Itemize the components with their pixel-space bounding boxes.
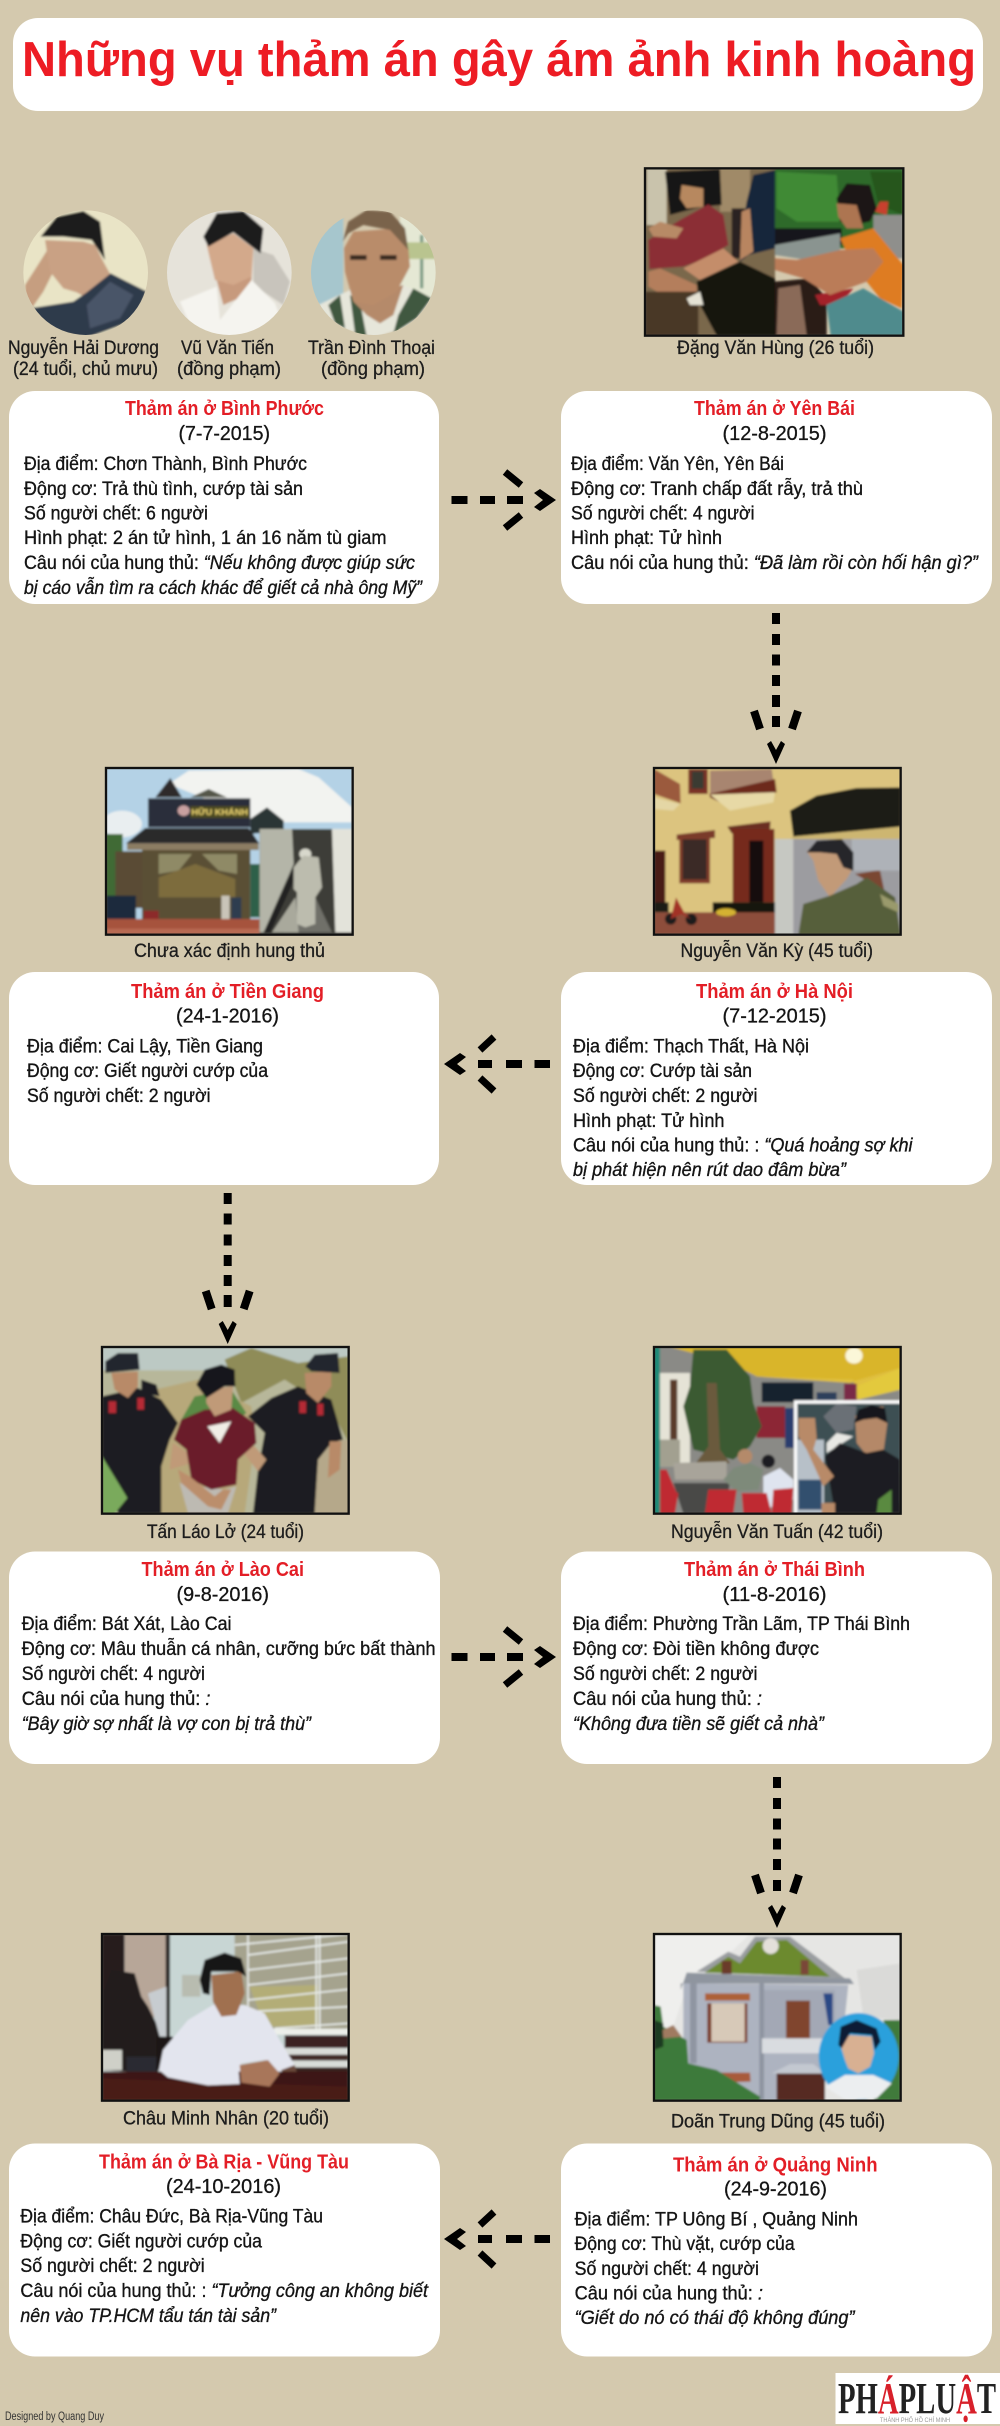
details: bị phát hiện nên rút dao đâm bừa” — [573, 1159, 847, 1181]
arrow: Lào Cai to Thái Bình — [452, 1629, 556, 1685]
heading: Thảm án ở Hà Nội — [696, 981, 853, 1003]
caption: Nguyễn Văn Kỳ: Nguyễn Văn Kỳ (45 tuổi) — [680, 940, 873, 962]
panel: Thảm án ở Yên Bái — [561, 391, 992, 604]
details: Câu nói của hung thủ: “Nếu không được giúp sức — [24, 552, 415, 574]
photo: Nguyễn Hải Dương portrait — [23, 210, 148, 335]
details: Địa điểm: Văn Yên, Yên Bái — [571, 453, 784, 475]
details: Địa điểm: Chơn Thành, Bình Phước — [24, 453, 307, 475]
photo: Châu Minh Nhân — [102, 1934, 349, 2101]
details: Câu nói của hung thủ: “Đã làm rồi còn hối hận gì?” — [571, 552, 979, 574]
arrow: Quảng Ninh to Bà Rịa - Vũng Tàu — [444, 2212, 550, 2266]
date: (11-8-2016) — [722, 1584, 826, 1606]
heading: Thảm án ở Bình Phước — [125, 398, 324, 420]
heading: Thảm án ở Thái Bình — [684, 1559, 865, 1581]
heading: Thảm án ở Quảng Ninh — [673, 2155, 878, 2177]
photo: Tấn Láo Lở arrest — [102, 1347, 349, 1514]
details: Động cơ: Giết người cướp của — [20, 2230, 262, 2252]
details — [20, 2206, 429, 2327]
heading: Thảm án ở Lào Cai — [142, 1559, 304, 1581]
panel: Thảm án ở Lào Cai — [9, 1552, 440, 1764]
caption: Tấn Láo Lở: Tấn Láo Lở (24 tuổi) — [147, 1522, 304, 1543]
panel: Thảm án ở Thái Bình — [561, 1552, 992, 1764]
details: Câu nói của hung thủ: : — [573, 1688, 762, 1710]
photo: Vũ Văn Tiến portrait — [167, 210, 292, 335]
details: Địa điểm: Bát Xát, Lào Cai — [22, 1613, 232, 1635]
logo: Pháp Luật: THÀNH PHỐ HỒ CHÍ MINH — [880, 2417, 950, 2424]
details — [575, 2208, 858, 2329]
caption: Châu Minh Nhân: Châu Minh Nhân (20 tuổi) — [123, 2108, 329, 2130]
photo: Tiền Giang scene: HỮU KHÁNH — [191, 808, 248, 817]
arrow: Hà Nội to Tiền Giang — [444, 1037, 550, 1091]
caption: first case suspects: Vũ Văn Tiến — [181, 338, 274, 359]
details: Số người chết: 2 người — [573, 1085, 758, 1107]
details: Câu nói của hung thủ: : “Quá hoảng sợ khi — [573, 1134, 913, 1156]
details: Câu nói của hung thủ: : — [22, 1688, 211, 1710]
details — [573, 1613, 910, 1735]
panel: Thảm án ở Bà Rịa - Vũng Tàu — [9, 2144, 440, 2356]
details: Hình phạt: 2 án tử hình, 1 án 16 năm tù giam — [24, 527, 386, 549]
details: Số người chết: 4 người — [22, 1663, 205, 1685]
date: (7-12-2015) — [722, 1006, 826, 1028]
details: Địa điểm: TP Uông Bí , Quảng Ninh — [575, 2208, 858, 2230]
details: Động cơ: Giết người cướp của — [27, 1060, 268, 1082]
heading: Thảm án ở Yên Bái — [694, 398, 855, 420]
caption: first case suspects: Trần Đình Thoại — [308, 338, 435, 359]
details: Động cơ: Đòi tiền không được — [573, 1638, 819, 1660]
panel: Thảm án ở Hà Nội — [561, 972, 992, 1185]
heading: Thảm án ở Tiền Giang — [131, 981, 324, 1003]
details — [571, 453, 979, 574]
panel: Thảm án ở Tiền Giang — [9, 972, 439, 1185]
details: Số người chết: 2 người — [573, 1663, 758, 1685]
title: Những vụ thảm án gây ám ảnh kinh hoàng — [22, 33, 976, 87]
details: nên vào TP.HCM tẩu tán tài sản” — [20, 2305, 277, 2327]
photo: Đặng Văn Hùng — [645, 168, 903, 336]
details: Số người chết: 4 người — [575, 2258, 759, 2280]
date: (24-1-2016) — [176, 1006, 279, 1028]
caption: first case suspects: (đồng phạm) — [177, 359, 281, 380]
details — [573, 1036, 913, 1181]
details: Động cơ: Tranh chấp đất rẫy, trả thù — [571, 477, 863, 500]
caption: first case suspects: Nguyễn Hải Dương — [8, 337, 159, 359]
panel: Thảm án ở Bình Phước — [9, 391, 439, 604]
arrow: Tiền Giang down to Lào Cai — [206, 1193, 250, 1344]
details: Câu nói của hung thủ: : — [575, 2283, 763, 2305]
details: Địa điểm: Thạch Thất, Hà Nội — [573, 1036, 809, 1058]
details: Địa điểm: Phường Trần Lãm, TP Thái Bình — [573, 1613, 910, 1635]
panel: title banner — [13, 18, 983, 111]
details: “Không đưa tiền sẽ giết cả nhà” — [573, 1713, 825, 1735]
details: Địa điểm: Cai Lậy, Tiền Giang — [27, 1036, 263, 1058]
details: Số người chết: 2 người — [27, 1085, 210, 1107]
caption: Doãn Trung Dũng: Doãn Trung Dũng (45 tuổi) — [671, 2112, 885, 2132]
details — [27, 1036, 268, 1107]
details: “Giết do nó có thái độ không đúng” — [575, 2307, 856, 2329]
caption: first case suspects — [8, 337, 435, 380]
caption: first case suspects: (đồng phạm) — [321, 359, 425, 380]
photo: Quảng Ninh house — [654, 1934, 901, 2101]
details: Động cơ: Cướp tài sản — [573, 1060, 752, 1082]
details: “Bây giờ sợ nhất là vợ con bị trả thù” — [22, 1713, 312, 1735]
credit: Designed by Quang Duy — [5, 2411, 104, 2423]
details — [24, 453, 423, 599]
heading: Thảm án ở Bà Rịa - Vũng Tàu — [99, 2152, 349, 2174]
caption: Tiền Giang suspect: Chưa xác định hung thủ — [134, 941, 325, 962]
photo: Thái Bình scene — [654, 1347, 901, 1514]
details: bị cáo vẫn tìm ra cách khác để giết cả nhà ông Mỹ” — [24, 576, 423, 599]
details: Động cơ: Thù vặt, cướp của — [575, 2233, 795, 2255]
details: Động cơ: Trả thù tình, cướp tài sản — [24, 478, 303, 500]
caption: Nguyễn Văn Tuấn: Nguyễn Văn Tuấn (42 tuổi) — [671, 1521, 883, 1543]
panel: Thảm án ở Quảng Ninh — [561, 2144, 992, 2356]
date: (7-7-2015) — [178, 423, 270, 445]
date: (9-8-2016) — [176, 1584, 269, 1606]
details: Động cơ: Mâu thuẫn cá nhân, cưỡng bức bất thành — [22, 1637, 436, 1660]
arrow: Bình Phước to Yên Bái — [452, 472, 556, 528]
photo: Hà Nội scene — [654, 768, 901, 935]
date: (24-10-2016) — [166, 2176, 281, 2198]
caption: first case suspects: (24 tuổi, chủ mưu) — [13, 359, 158, 380]
details — [22, 1613, 436, 1735]
details: Số người chết: 2 người — [20, 2255, 205, 2277]
details: Hình phạt: Tử hình — [573, 1110, 724, 1132]
photo: Tiền Giang scene — [102, 768, 353, 935]
details: Hình phạt: Tử hình — [571, 527, 722, 549]
details: Số người chết: 4 người — [571, 502, 754, 524]
arrow: Thái Bình down to Quảng Ninh — [755, 1777, 799, 1928]
caption: Đặng Văn Hùng: Đặng Văn Hùng (26 tuổi) — [677, 338, 874, 359]
details: Câu nói của hung thủ: : “Tưởng công an không biết — [20, 2280, 429, 2302]
details: Địa điểm: Châu Đức, Bà Rịa-Vũng Tàu — [20, 2206, 323, 2228]
details: Số người chết: 6 người — [24, 502, 208, 524]
arrow: Yên Bái down to Hà Nội — [754, 613, 798, 764]
date: (24-9-2016) — [724, 2179, 827, 2201]
photo: Trần Đình Thoại portrait — [311, 210, 436, 335]
date: (12-8-2015) — [722, 423, 826, 445]
